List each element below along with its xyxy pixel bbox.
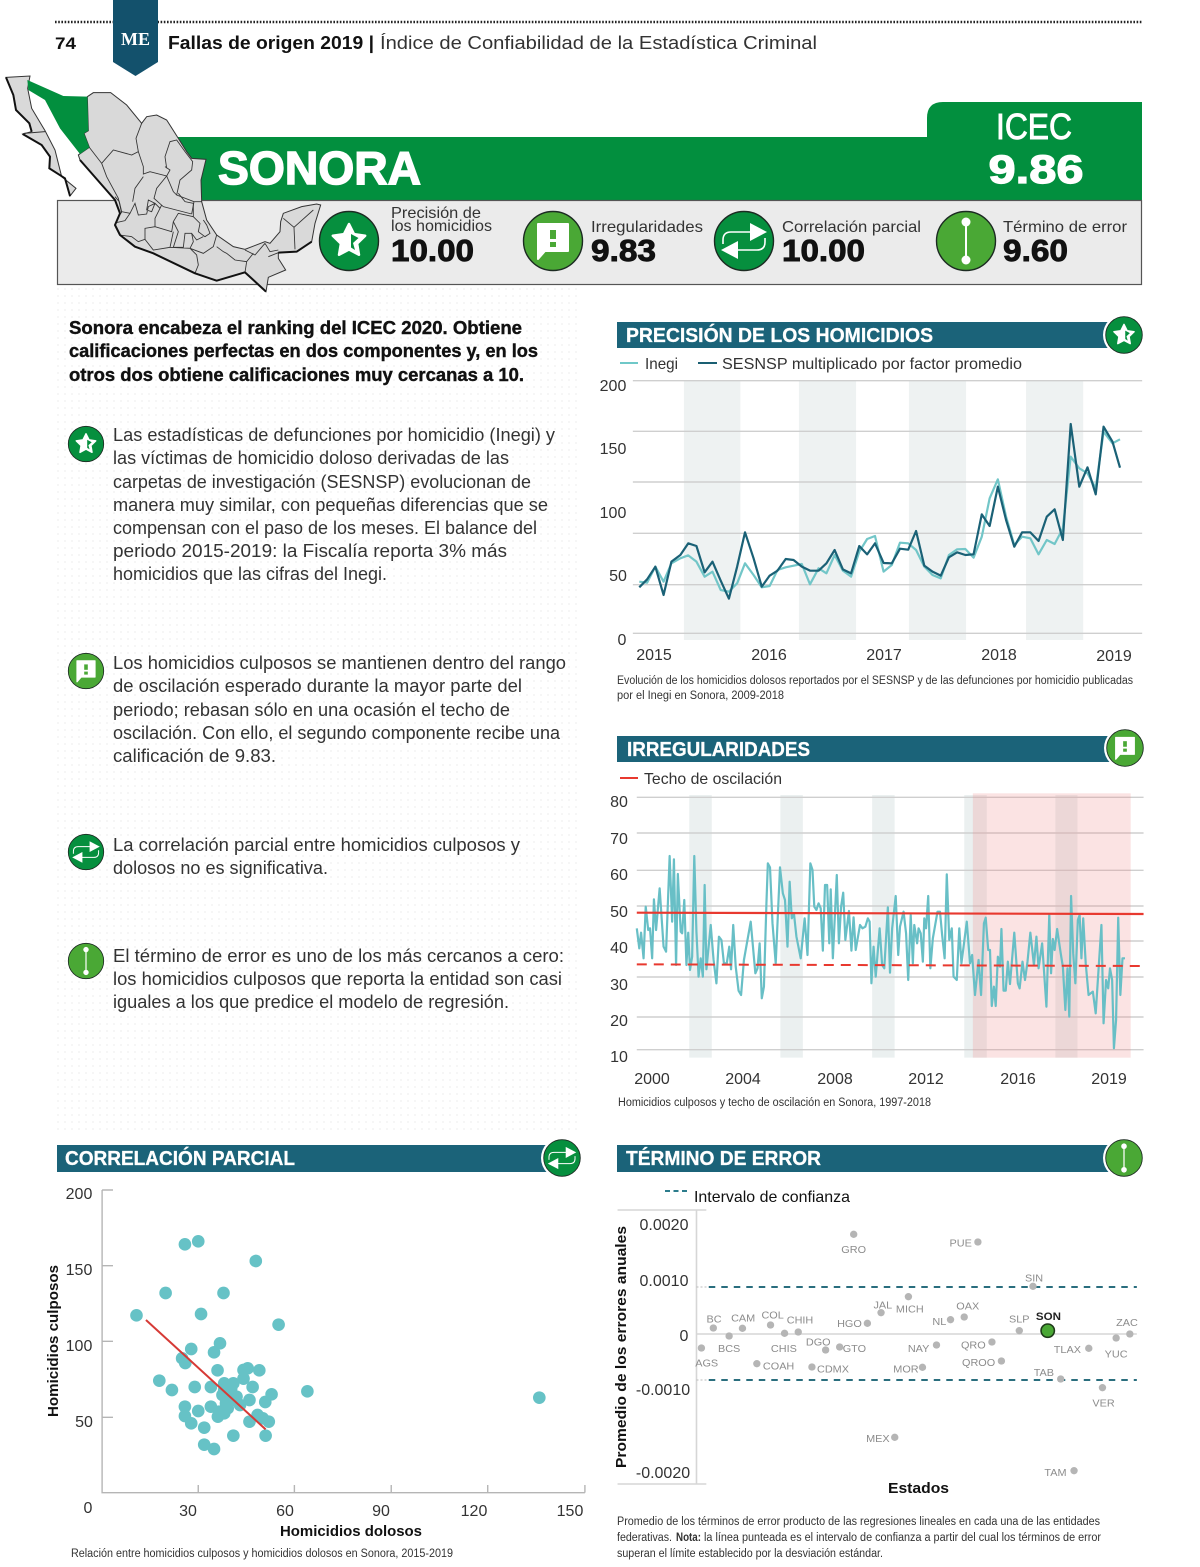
text block: irregularities: calificación de 9.83. (113, 746, 276, 766)
score: irregularities (524, 212, 703, 270)
axis labels: 2015 (636, 647, 672, 664)
axis labels: 30 (610, 977, 628, 994)
axis labels: 2017 (866, 647, 902, 664)
axis labels: -0.0010 (636, 1382, 690, 1399)
dot plot by state: DGO (806, 1337, 831, 1348)
dot plot by state: MICH (896, 1304, 924, 1316)
axis labels: 2018 (981, 647, 1017, 664)
dot plot by state: TAM (1044, 1467, 1067, 1479)
icon: speech bubble (68, 653, 104, 689)
axis labels: 2016 (1000, 1071, 1036, 1088)
dot plot by state: GRO (841, 1244, 866, 1256)
thick coastline (80, 160, 312, 292)
text block: precision: manera muy similar, con pequeñas diferencias que se (113, 495, 548, 515)
text block: irregularities: de oscilación esperado durante la mayor parte del (113, 676, 522, 696)
caption: la línea punteada es el intervalo de confianza a partir del cual los términos de error (704, 1532, 1101, 1544)
caption: Homicidios culposos y techo de oscilación en Sonora, 1997-2018 (618, 1097, 931, 1109)
text block: precision: Las estadísticas de defunciones por homicidio (Inegi) y (113, 425, 555, 445)
dot plot by state: VER (1092, 1398, 1115, 1409)
dot plot by state: SIN (1025, 1273, 1043, 1284)
section heading: CORRELACIÓN PARCIAL (65, 1146, 295, 1170)
text block: irregularities (68, 653, 566, 766)
component scores panel (58, 200, 1142, 284)
section heading (617, 1137, 1145, 1179)
caption: federativas. (617, 1532, 672, 1544)
axis labels: 40 (610, 940, 628, 957)
axis labels: 60 (276, 1503, 294, 1520)
axis labels: 200 (600, 378, 626, 395)
text block: precision: carpetas de investigación (SESNSP) evolucionan de (113, 472, 531, 492)
text block: error term: los homicidios culposos que reporta la entidad son casi (113, 969, 562, 989)
dot plot by state: QROO (962, 1357, 995, 1369)
axis labels: 0.0010 (640, 1273, 689, 1290)
axis labels: 150 (600, 441, 626, 458)
legend: Intervalo de confianza (694, 1189, 850, 1206)
axis labels: 150 (66, 1262, 92, 1279)
running title: Fallas de origen 2019 | (168, 33, 374, 53)
text block: irregularities: periodo; rebasan sólo en una ocasión el techo de (113, 700, 510, 720)
lead paragraph: otros dos obtiene calificaciones muy cercanas a 10. (69, 365, 524, 385)
dot plot by state (613, 1210, 1138, 1497)
axis titles (45, 1265, 422, 1540)
section heading: TÉRMINO DE ERROR (626, 1147, 822, 1170)
dot plot by state: OAX (956, 1301, 979, 1313)
highlighted point: Sonora (1036, 1311, 1061, 1337)
dot plot by state: HGO (837, 1318, 862, 1330)
score: error term (936, 212, 1128, 270)
ICEC score: ICEC (996, 106, 1072, 147)
section heading (57, 1137, 583, 1179)
axis labels: -0.0020 (636, 1465, 690, 1482)
axis labels (610, 794, 1127, 1088)
axis titles: Homicidios culposos (45, 1265, 62, 1417)
dot plot by state: YUC (1105, 1349, 1128, 1360)
dotted background of text column (57, 288, 582, 1133)
dot plot by state: CAM (731, 1313, 755, 1325)
section heading (617, 314, 1145, 356)
axis labels: 100 (66, 1338, 92, 1355)
score: partial correlation: 10.00 (782, 233, 865, 268)
axis labels: 0.0020 (640, 1217, 689, 1234)
page header (55, 0, 1142, 76)
dot plot by state: ZAC (1116, 1317, 1138, 1329)
Sonora (27, 80, 89, 154)
text block: precision: las víctimas de homicidio doloso derivadas de las (113, 448, 509, 468)
legend: Inegi (645, 356, 678, 373)
axis labels: 70 (610, 831, 628, 848)
axis labels (66, 1186, 583, 1520)
text block: precision: periodo 2015-2019: la Fiscalía reporta 3% más (113, 541, 507, 561)
section heading: PRECISIÓN DE LOS HOMICIDIOS (626, 323, 933, 347)
dot plot by state: SLP (1009, 1314, 1030, 1326)
dot plot by state: PUE (950, 1238, 972, 1249)
axis titles: Promedio de los errores anuales (613, 1226, 630, 1468)
axis labels: 90 (372, 1503, 390, 1520)
score: partial correlation (714, 212, 921, 270)
axis labels: 2004 (725, 1071, 761, 1088)
dot plot by state: JAL (873, 1300, 892, 1312)
caption: Evolución de los homicidios dolosos reportados por el SESNSP y de las defunciones por homicidio publicadas (617, 675, 1133, 687)
axis labels: 2012 (908, 1071, 944, 1088)
bookmark tag ME: ME (121, 29, 150, 49)
dot plot by state: NL (932, 1316, 946, 1328)
axis labels (600, 378, 1132, 665)
panel: error term (613, 1137, 1145, 1560)
score: partial correlation: Correlación parcial (782, 219, 921, 236)
axis labels: 80 (610, 794, 628, 811)
icon: star (68, 426, 104, 462)
axis labels: 200 (66, 1186, 92, 1203)
axis labels: 20 (610, 1013, 628, 1030)
lead paragraph: calificaciones perfectas en dos componentes y, en los (69, 341, 538, 361)
dot plot by state: CHIH (787, 1315, 813, 1327)
highlighted point: Sonora: SON (1036, 1311, 1061, 1323)
axis labels: 2000 (634, 1071, 670, 1088)
icon: arrows (68, 834, 104, 870)
map of Mexico with Sonora highlighted (6, 76, 321, 292)
caption (617, 1516, 1101, 1560)
score: irregularities: Irregularidades (591, 219, 703, 236)
icon: interval bar (68, 943, 104, 979)
axis labels: 100 (600, 505, 626, 522)
axis labels: 50 (609, 568, 627, 585)
section heading (617, 727, 1146, 769)
dot plot by state: COAH (763, 1361, 794, 1372)
dot plot by state: AGS (695, 1358, 718, 1369)
caption: Nota: (676, 1532, 701, 1544)
axis labels: 2016 (751, 647, 787, 664)
axis labels: 60 (610, 867, 628, 884)
panel: partial correlation (45, 1137, 585, 1560)
text block: correlation (68, 834, 520, 878)
panel: precision of homicides (600, 314, 1145, 702)
lead paragraph: Sonora encabeza el ranking del ICEC 2020. Obtiene (69, 318, 522, 338)
axis labels: 2008 (817, 1071, 853, 1088)
axis labels: 10 (610, 1049, 628, 1066)
axis labels: 2019 (1096, 648, 1132, 665)
section heading: IRREGULARIDADES (627, 739, 810, 761)
dot plot by state: QRO (961, 1340, 986, 1352)
green title band (170, 102, 1142, 200)
axis titles: Homicidios dolosos (280, 1523, 422, 1540)
axis labels: 150 (557, 1503, 583, 1520)
caption: por el Inegi en Sonora, 2009-2018 (617, 690, 784, 702)
axis labels: 120 (461, 1503, 487, 1520)
axis labels: 2019 (1091, 1071, 1127, 1088)
ICEC score: 9.86 (988, 148, 1084, 192)
ICEC score (988, 106, 1084, 192)
dot plot by state: BC (706, 1314, 722, 1326)
dot plot by state: MEX (866, 1433, 890, 1445)
lead paragraph (69, 318, 538, 385)
score: irregularities: 9.83 (591, 233, 656, 268)
text block: error term: El término de error es uno de los más cercanos a cero: (113, 946, 564, 966)
panel: irregularities (610, 727, 1146, 1109)
scatter plot (45, 1186, 585, 1540)
caption: superan el límite establecido por la desviación estándar. (617, 1548, 883, 1560)
text block: error term (68, 943, 564, 1012)
dot plot by state: CHIS (771, 1343, 797, 1355)
axis labels (636, 1217, 690, 1482)
line chart (600, 378, 1142, 665)
legend: Techo de oscilación (644, 771, 782, 788)
bookmark tag ME (113, 0, 158, 76)
dot plot by state: GTO (843, 1343, 866, 1355)
axis labels: 0 (84, 1500, 93, 1517)
axis labels: 0 (618, 632, 627, 649)
dot plot by state: TAB (1034, 1367, 1054, 1379)
dot plot by state: TLAX (1054, 1344, 1081, 1356)
page number: 74 (55, 34, 77, 53)
axis labels: 50 (610, 904, 628, 921)
dot plot by state: NAY (908, 1343, 929, 1355)
state title: SONORA (218, 142, 421, 194)
line chart (610, 793, 1144, 1088)
dot plot by state: CDMX (817, 1364, 849, 1376)
caption: Promedio de los términos de error producto de las regresiones lineales en cada una de las entidades (617, 1516, 1100, 1528)
score: error term: Término de error (1003, 219, 1128, 236)
text block: error term: iguales a los que predice el modelo de regresión. (113, 992, 509, 1012)
text block: correlation: La correlación parcial entre homicidios culposos y (113, 835, 520, 855)
score: error term: 9.60 (1003, 233, 1068, 268)
text block: precision: homicidios que las cifras del Inegi. (113, 564, 387, 584)
axis labels: 50 (75, 1414, 93, 1431)
axis labels: 30 (179, 1503, 197, 1520)
score: precision: Precisión de (391, 205, 481, 222)
caption (617, 675, 1133, 702)
score: precision (320, 205, 492, 270)
dot plot by state: MOR (893, 1364, 919, 1376)
axis titles: Estados (888, 1480, 949, 1497)
axis titles (613, 1226, 949, 1497)
caption: Relación entre homicidios culposos y homicidios dolosos en Sonora, 2015-2019 (71, 1548, 453, 1560)
text block: precision: compensan con el paso de los meses. El balance del (113, 518, 537, 538)
text block: correlation: dolosos no es significativa. (113, 858, 328, 878)
text block: precision (68, 425, 555, 584)
legend: SESNSP multiplicado por factor promedio (722, 356, 1022, 373)
dot plot by state: COL (761, 1310, 784, 1322)
dot plot by state: BCS (718, 1343, 740, 1355)
running title: Índice de Confiabilidad de la Estadística Criminal (380, 33, 817, 53)
text block: irregularities: Los homicidios culposos se mantienen dentro del rango (113, 653, 566, 673)
text block: irregularities: oscilación. Con ello, el segundo componente recibe una (113, 723, 561, 743)
score: precision: los homicidios (391, 218, 492, 235)
axis labels: 0 (680, 1328, 689, 1345)
score: precision: 10.00 (391, 233, 474, 268)
running title (168, 33, 817, 53)
